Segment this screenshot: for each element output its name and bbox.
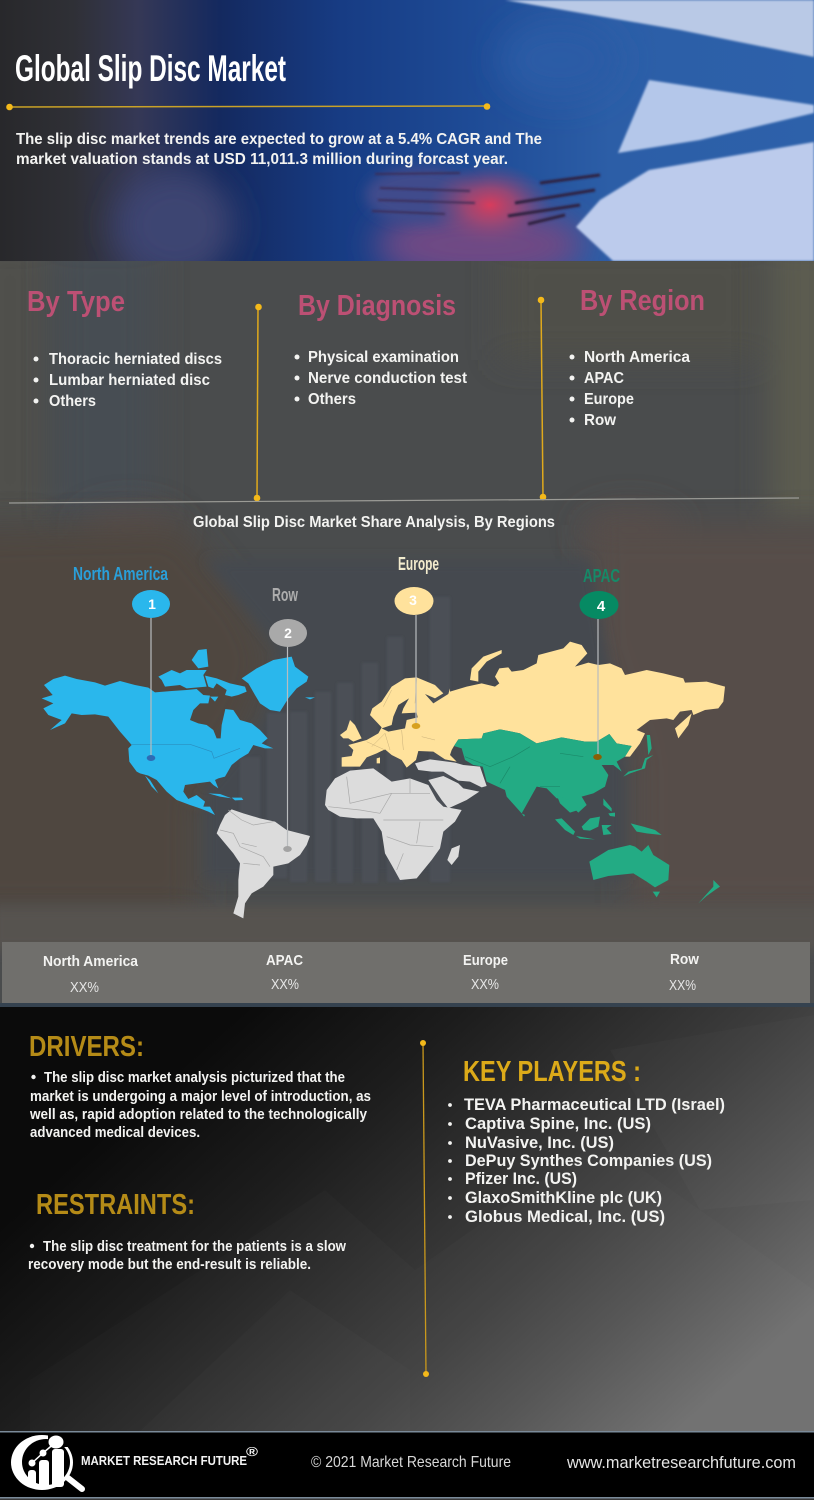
chart: world map by region xyxy=(42,554,725,918)
divider: vertical gold line 2 xyxy=(538,297,546,500)
website: www.marketresearchfuture.com xyxy=(566,1453,796,1472)
list: type segments: Others xyxy=(49,393,96,410)
drivers text: well as, rapid adoption related to the technologically xyxy=(29,1106,368,1123)
pin 4: APAC: APAC xyxy=(583,566,620,586)
heading: By Type: By Type xyxy=(27,286,125,318)
By Diagnosis column xyxy=(294,290,468,408)
pin 1: North America: 1 xyxy=(148,596,156,612)
restraints text: recovery mode but the end-result is reliable. xyxy=(28,1256,311,1273)
share: North America: North America xyxy=(43,953,139,970)
pin 4: APAC xyxy=(580,566,620,760)
drivers text: The slip disc market analysis picturized that the xyxy=(44,1069,345,1086)
pin 2: Row xyxy=(269,585,307,852)
list: key players: GlaxoSmithKline plc (UK) xyxy=(465,1188,662,1207)
gold rule with end dots xyxy=(6,103,490,110)
By Region column xyxy=(570,285,705,429)
logo icon: magnifier with bars xyxy=(11,1433,82,1490)
share: Europe: Europe xyxy=(463,952,508,969)
share: Europe: XX% xyxy=(471,976,499,993)
share: Row: XX% xyxy=(669,977,696,994)
divider: vertical gold line 3 xyxy=(420,1040,429,1377)
registered mark: ® xyxy=(246,1444,259,1459)
intro text: The slip disc market trends are expected to grow at a 5.4% CAGR and The xyxy=(16,131,542,148)
drivers text: market is undergoing a major level of introduction, as xyxy=(30,1088,371,1105)
list: diagnosis segments: Nerve conduction test xyxy=(308,370,468,387)
list: regions: APAC xyxy=(584,370,624,387)
list: key players: NuVasive, Inc. (US) xyxy=(465,1133,614,1152)
By Type column xyxy=(27,286,222,410)
heading: By Region: By Region xyxy=(580,285,705,317)
intro text: market valuation stands at USD 11,011.3 million during forcast year. xyxy=(16,151,508,168)
list: type segments: Lumbar herniated disc xyxy=(49,372,210,389)
pin 2: Row: 2 xyxy=(284,625,292,641)
drivers text xyxy=(29,1069,371,1141)
intro text xyxy=(16,131,542,168)
logo wordmark: MARKET RESEARCH FUTURE xyxy=(81,1453,247,1468)
list: regions xyxy=(570,349,690,429)
pin lines xyxy=(151,615,598,849)
pin 1: North America xyxy=(73,564,170,761)
pin 3: Europe: 3 xyxy=(409,592,417,608)
list: diagnosis segments: Others xyxy=(308,391,356,408)
pin 2: Row: Row xyxy=(272,585,299,605)
list: key players: TEVA Pharmaceutical LTD (Israel) xyxy=(464,1095,725,1114)
list: key players: DePuy Synthes Companies (US) xyxy=(465,1151,712,1170)
map region: Asia xyxy=(454,729,653,817)
list: key players: Globus Medical, Inc. (US) xyxy=(465,1207,665,1226)
share: North America: XX% xyxy=(70,979,99,996)
share: APAC xyxy=(266,952,303,993)
footer bar xyxy=(0,1431,814,1500)
list: regions: Europe xyxy=(584,391,634,408)
title: Global Slip Disc Market xyxy=(15,48,286,89)
list: key players: Captiva Spine, Inc. (US) xyxy=(465,1114,651,1133)
map region: Africa and Middle East xyxy=(325,759,487,880)
list: diagnosis segments: Physical examination xyxy=(308,349,459,366)
heading: By Diagnosis: By Diagnosis xyxy=(298,290,456,322)
heading: Drivers: DRIVERS: xyxy=(29,1031,144,1063)
pin 1: North America: North America xyxy=(73,564,169,584)
pin 4: APAC: 4 xyxy=(597,598,606,615)
panel background xyxy=(0,1007,814,1431)
drivers text: advanced medical devices. xyxy=(30,1124,200,1141)
share: APAC: APAC xyxy=(266,952,303,969)
share: Row: Row xyxy=(670,951,699,968)
share: North America xyxy=(43,953,139,996)
map region: Oceania and South-East Asia xyxy=(555,795,720,903)
restraints text xyxy=(28,1238,346,1273)
map region: North America xyxy=(42,649,315,815)
share: APAC: XX% xyxy=(271,976,299,993)
restraints text: The slip disc treatment for the patients is a slow xyxy=(43,1238,346,1255)
panel: regional share strip xyxy=(0,942,814,1007)
list: key players xyxy=(448,1095,725,1226)
panel: hero banner xyxy=(0,0,814,283)
share: Row xyxy=(669,951,699,994)
panel: drivers, restraints and key players xyxy=(0,1007,814,1431)
map region: South America xyxy=(217,809,310,918)
list: key players: Pfizer Inc. (US) xyxy=(465,1169,577,1188)
hero photo: back pain illustration xyxy=(0,0,814,283)
list: type segments xyxy=(34,351,222,410)
map section heading: Global Slip Disc Market Share Analysis, By Regions xyxy=(193,514,555,531)
panel: segmentation and map background xyxy=(0,240,814,1005)
map region: Europe and Russia xyxy=(340,642,725,768)
list: type segments: Thoracic herniated discs xyxy=(49,351,222,368)
share: Europe xyxy=(463,952,508,993)
pin 3: Europe: Europe xyxy=(398,554,439,574)
pin 3: Europe xyxy=(394,554,439,729)
heading: Restraints: RESTRAINTS: xyxy=(36,1189,195,1221)
divider: vertical gold line 1 xyxy=(254,304,262,501)
heading: Key Players: KEY PLAYERS : xyxy=(463,1056,641,1088)
list: regions: North America xyxy=(584,349,690,366)
copyright: © 2021 Market Research Future xyxy=(311,1454,511,1471)
list: diagnosis segments xyxy=(294,349,468,408)
list: regions: Row xyxy=(584,412,617,429)
